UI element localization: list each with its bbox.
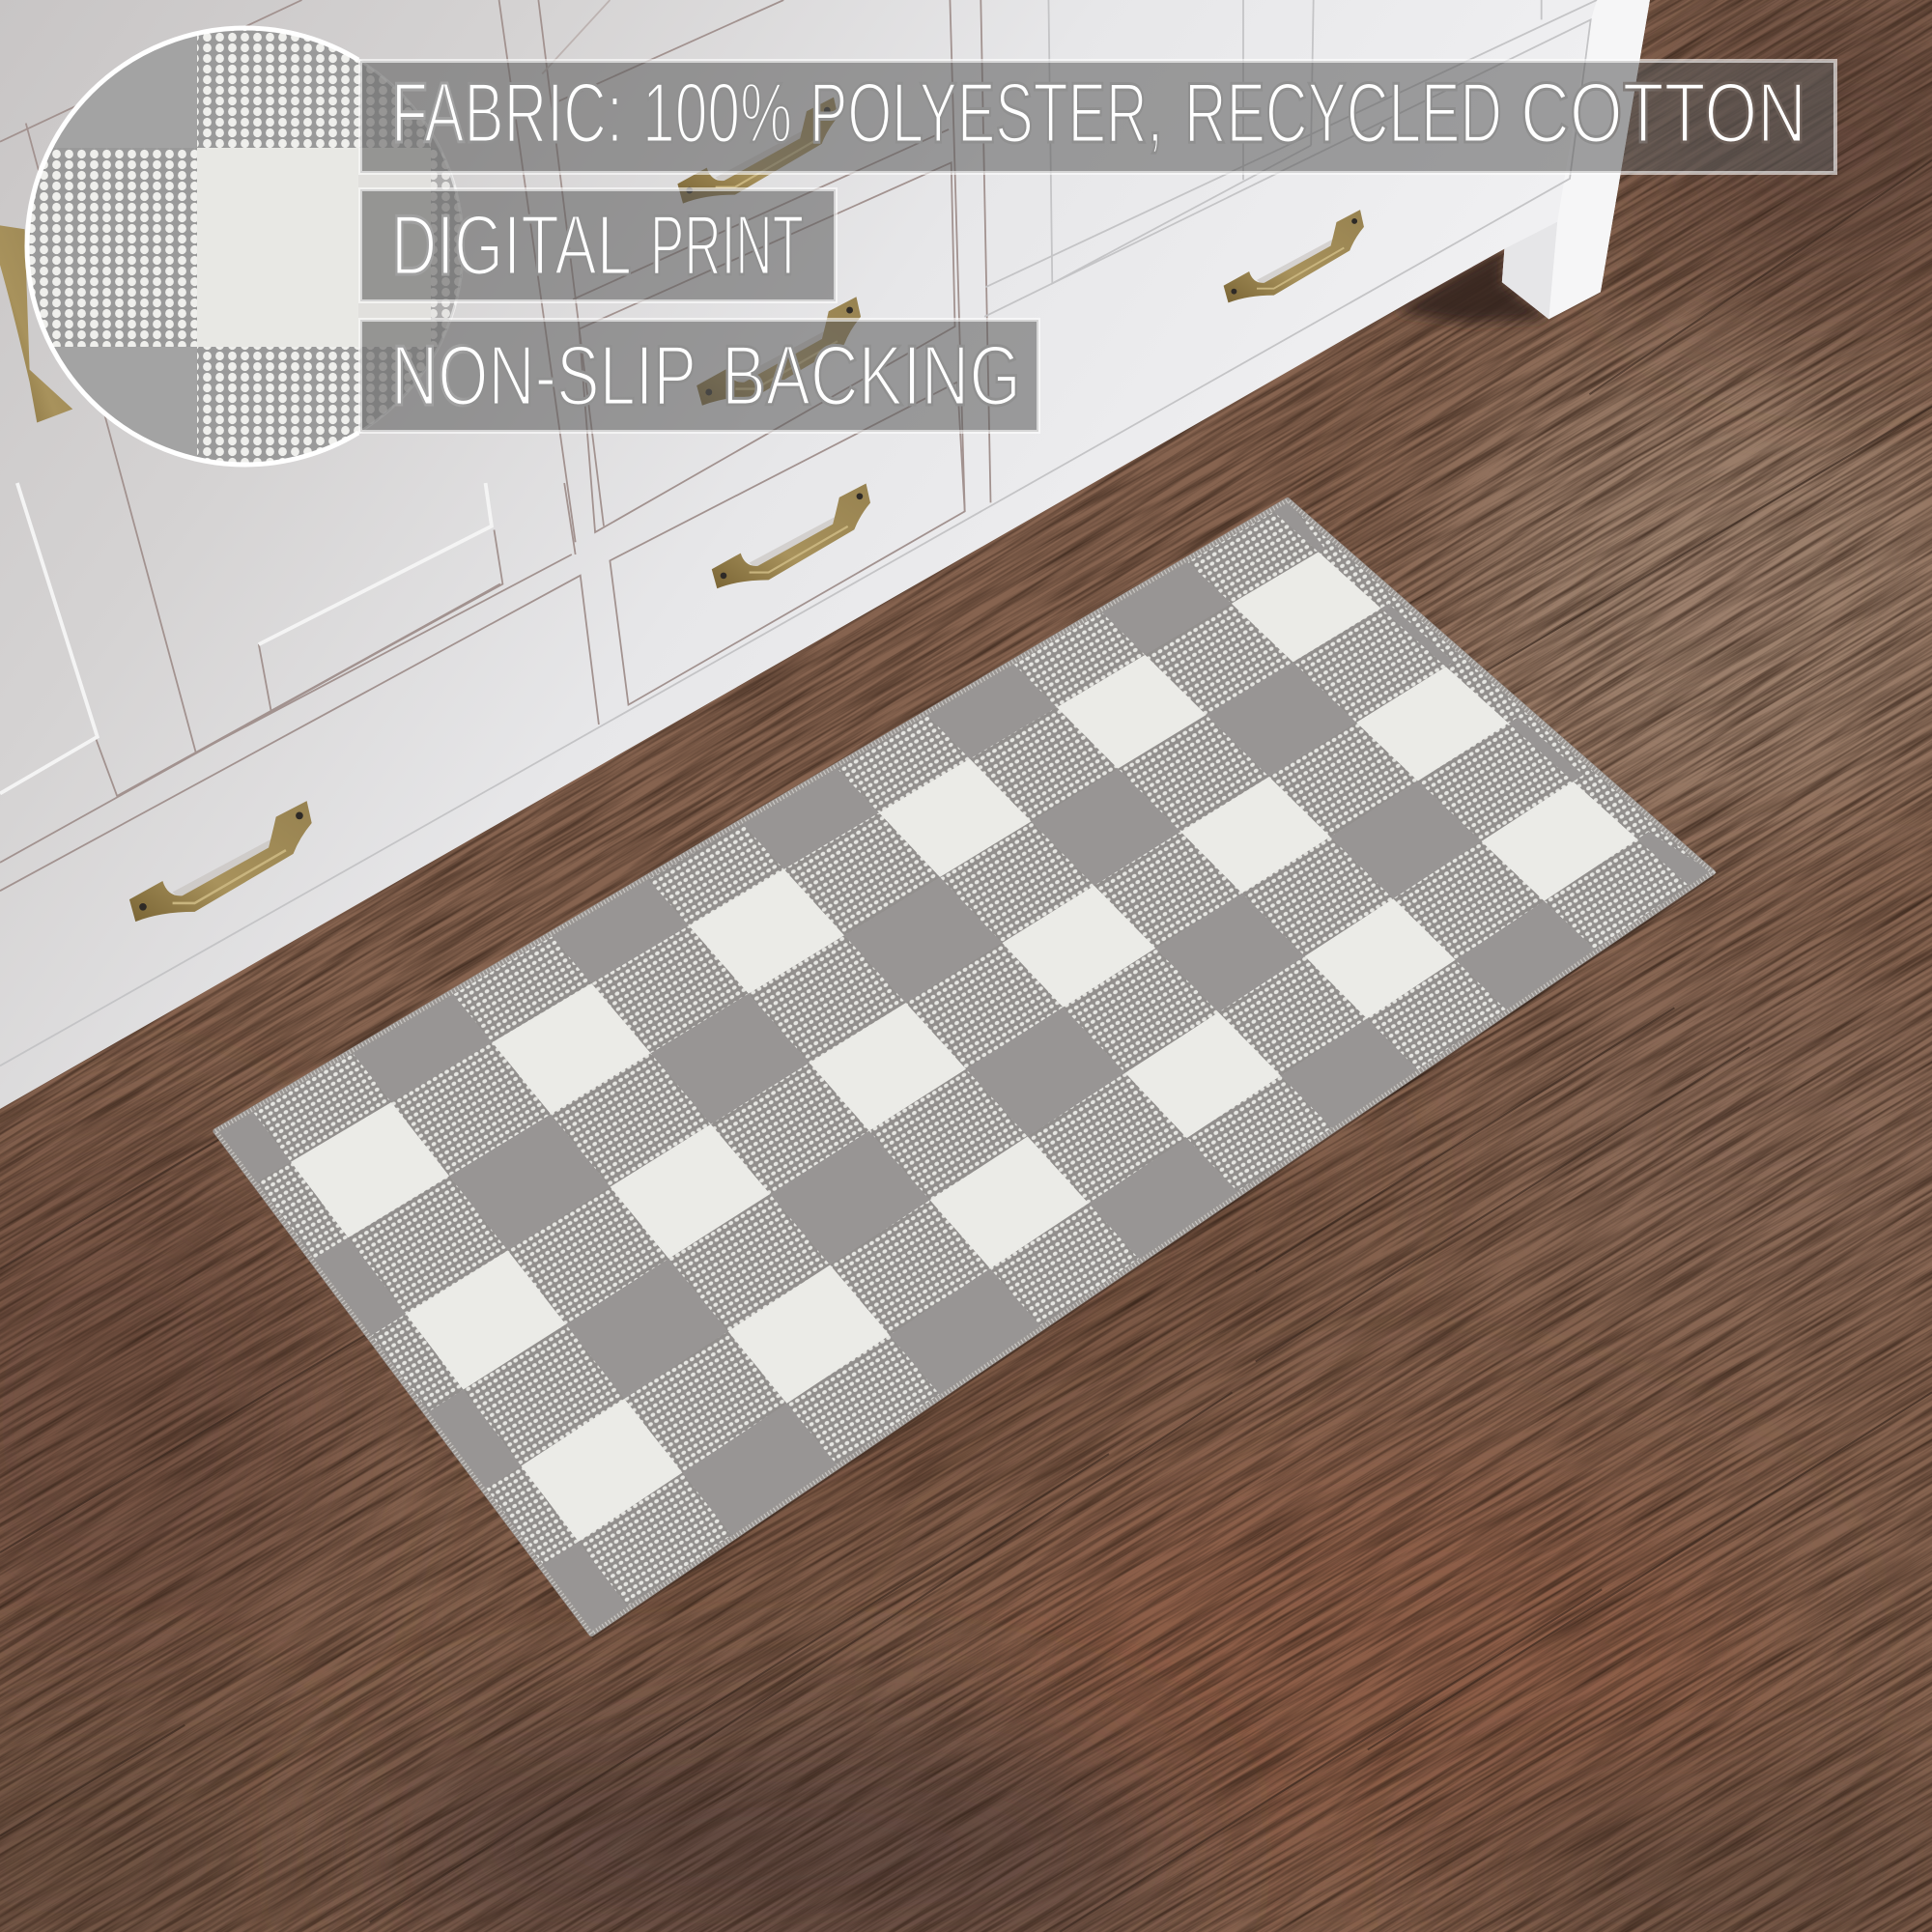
callout: digital print: DIGITAL [391, 197, 632, 293]
callout: fabric [360, 61, 1835, 173]
callout: fabric: POLYESTER, [810, 65, 1163, 160]
shadow under cabinet [1392, 249, 1548, 323]
cabinet door and drawer seams [0, 0, 991, 891]
drawer handle: lower left [129, 801, 312, 922]
callout: fabric: 100% [642, 65, 792, 160]
callout: fabric: FABRIC: [391, 65, 623, 160]
callout: non-slip backing [360, 320, 1038, 432]
door handle: far left [0, 225, 72, 422]
callout: fabric: COTTON [1520, 65, 1806, 160]
buffalo check rug [215, 500, 1714, 1638]
callout: digital print [360, 189, 836, 301]
callout: non-slip backing: NON-SLIP [391, 327, 696, 423]
callout: non-slip backing: BACKING [722, 327, 1021, 423]
callout: digital print: PRINT [650, 197, 804, 293]
drawer handle: right [1224, 210, 1364, 302]
drawer handle: upper centre [677, 98, 838, 204]
callout: fabric: RECYCLED [1184, 65, 1502, 160]
circular fabric close-up [25, 25, 464, 468]
drawer handle: centre [712, 483, 870, 588]
white cabinet [0, 0, 1650, 1109]
drawer handle: middle centre [696, 297, 861, 406]
